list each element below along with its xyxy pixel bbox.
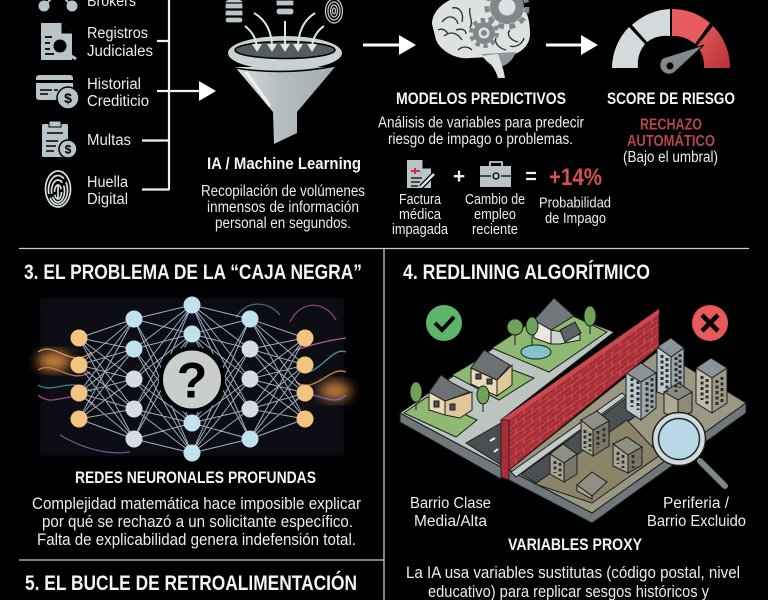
- text: caja negra description: [32, 495, 361, 549]
- neural network illustration: [37, 296, 351, 462]
- label: Historial Crediticio: Historial: [87, 76, 141, 93]
- heading: 4. Redlining algorítmico: 4. REDLINING ALGORÍTMICO: [403, 259, 650, 284]
- heading: redes neuronales profundas: REDES NEURONALES PROFUNDAS: [75, 468, 316, 487]
- panel: caja negra: [24, 260, 362, 549]
- icon: funnel: [228, 36, 342, 144]
- house: front: [429, 375, 472, 418]
- ruined buildings: [550, 411, 642, 499]
- illustration: favoured neighbourhood: [400, 298, 614, 479]
- gauge: [612, 9, 730, 74]
- label: Registros Judiciales: [87, 25, 153, 60]
- stat: +14%: +14%: [549, 164, 602, 191]
- label: Registros Judiciales: Judiciales: [87, 43, 153, 60]
- label: Historial Crediticio: Crediticio: [87, 93, 149, 110]
- text: caja negra description: por qué se rechazó a un solicitante específico.: [42, 513, 353, 531]
- text: redlining description: La IA usa variables sustitutas (código postal, nivel: [406, 564, 740, 582]
- text: funnel description: [201, 183, 365, 232]
- city towers: [626, 338, 727, 420]
- panel: predictive models: [378, 0, 611, 238]
- label: Periferia / Barrio Excluido: Periferia /: [663, 495, 730, 512]
- text: funnel description: personal en segundos.: [215, 215, 351, 232]
- label: Factura médica impagada: impagada: [392, 222, 449, 238]
- heading: MODELOS PREDICTIVOS: MODELOS PREDICTIVOS: [396, 89, 566, 108]
- house: top: [534, 298, 581, 344]
- label: Historial Crediticio: [87, 76, 149, 110]
- dividers: [19, 248, 749, 600]
- label: Probabilidad de Impago: [539, 196, 611, 227]
- label: Cambio de empleo reciente: Cambio de: [465, 192, 525, 208]
- arrow: funnel to models: [363, 35, 416, 55]
- label: Huella Digital: Huella: [87, 174, 128, 191]
- text: bajo el umbral: (Bajo el umbral): [623, 149, 718, 166]
- icon: credit card: [36, 75, 79, 109]
- arrow: bracket into funnel: [142, 0, 216, 190]
- icon: fingerprint: [46, 171, 70, 207]
- label: Cambio de empleo reciente: reciente: [472, 222, 518, 238]
- label: Periferia / Barrio Excluido: [647, 495, 746, 530]
- icon: database cylinders: [225, 0, 294, 23]
- panel: risk score: [607, 9, 735, 166]
- icon: medical invoice: [407, 160, 434, 188]
- icon: question mark: ?: [177, 352, 207, 408]
- heading: SCORE DE RIESGO: SCORE DE RIESGO: [607, 89, 735, 108]
- label: Huella Digital: Digital: [87, 191, 128, 208]
- label: Multas: Multas: [87, 132, 131, 149]
- network connections: [79, 305, 305, 453]
- illustration: excluded neighbourhood: [509, 338, 746, 523]
- label: Probabilidad de Impago: Probabilidad: [539, 196, 611, 212]
- text: models description: [378, 114, 584, 148]
- arrow: models to score: [546, 35, 598, 55]
- panel: data sources: [36, 0, 216, 208]
- symbol: plus: +: [453, 165, 465, 188]
- icon: magnifying glass: [652, 412, 725, 486]
- icon: judicial records document: [41, 23, 76, 60]
- illustration: brick wall: [501, 309, 659, 480]
- text: redlining description: [406, 564, 740, 600]
- icon: brain with gears: [432, 0, 530, 78]
- icon: briefcase: [480, 162, 511, 187]
- label: Cambio de empleo reciente: empleo: [474, 207, 516, 223]
- panel: redlining: [400, 259, 746, 600]
- icon: credit card: $: [64, 90, 72, 106]
- text: caja negra description: Complejidad matemática hace imposible explicar: [32, 495, 361, 513]
- label: Barrio Clase Media/Alta: Media/Alta: [414, 513, 487, 530]
- text: rechazo automático: [627, 116, 715, 150]
- arrows: data into funnel: [245, 13, 324, 52]
- label: Periferia / Barrio Excluido: Barrio Excluido: [647, 513, 746, 530]
- icon: green check: [426, 305, 462, 341]
- heading: 5. El bucle de retroalimentación: 5. EL BUCLE DE RETROALIMENTACIÓN: [25, 570, 357, 595]
- text: rechazo automático: AUTOMÁTICO: [627, 133, 715, 150]
- heading: 3. El problema de la caja negra: 3. EL PROBLEMA DE LA “CAJA NEGRA”: [24, 260, 362, 284]
- label: Cambio de empleo reciente: [465, 192, 525, 238]
- icon: fines clipboard: [42, 121, 77, 158]
- symbol: equals: [526, 173, 536, 179]
- text: models description: Análisis de variables para predecir: [378, 114, 584, 132]
- label: Probabilidad de Impago: de Impago: [545, 211, 606, 227]
- house: middle: [471, 350, 512, 396]
- text: caja negra description: Falta de explicabilidad genera indefensión total.: [37, 531, 356, 549]
- icon: question mark: [161, 348, 223, 410]
- label: Factura médica impagada: [392, 192, 449, 238]
- icon: fines clipboard: $: [65, 142, 72, 156]
- label: Registros Judiciales: Registros: [87, 25, 148, 42]
- panel: machine learning funnel: [201, 0, 416, 232]
- icon: red cross: [692, 305, 728, 341]
- label: Factura médica impagada: Factura: [399, 192, 442, 208]
- heading: IA / Machine Learning: IA / Machine Learning: [207, 154, 361, 173]
- label: Factura médica impagada: médica: [399, 207, 442, 223]
- text: rechazo automático: RECHAZO: [640, 116, 702, 134]
- icon: data brokers network: [39, 0, 77, 11]
- network nodes: [70, 296, 314, 462]
- icon: fingerprint source: [326, 0, 342, 23]
- text: models description: riesgo de impago o problemas.: [388, 131, 573, 148]
- text: funnel description: inmensos de información: [207, 199, 359, 216]
- label: Barrio Clase Media/Alta: [410, 495, 491, 530]
- label: Huella Digital: [87, 174, 128, 208]
- label: Barrio Clase Media/Alta: Barrio Clase: [410, 495, 491, 512]
- heading: variables proxy: VARIABLES PROXY: [508, 535, 643, 554]
- trees and pond: [410, 306, 596, 412]
- text: funnel description: Recopilación de volúmenes: [201, 183, 365, 200]
